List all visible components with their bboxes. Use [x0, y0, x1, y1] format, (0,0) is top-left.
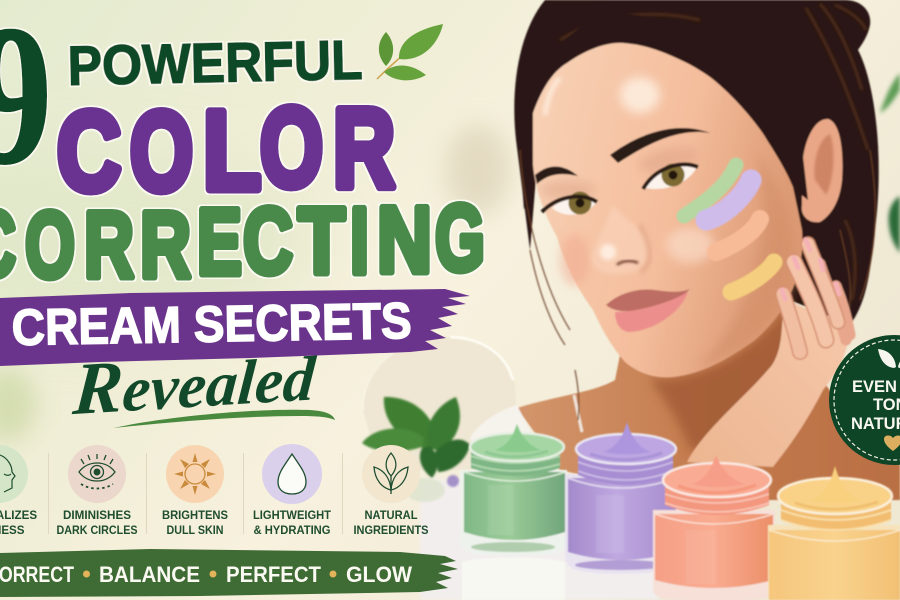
hydrating label: & HYDRATING [254, 524, 330, 537]
right eye [643, 164, 698, 189]
top strap [574, 395, 582, 432]
brightens label: BRIGHTENS [162, 509, 228, 522]
ingredients label: NATURAL [364, 509, 418, 522]
woman portrait [470, 0, 900, 500]
left eye [542, 192, 597, 215]
forehead highlight [620, 77, 660, 113]
jar: purple [565, 422, 678, 574]
redness label [0, 509, 37, 537]
ring finger [783, 294, 800, 352]
badge text [851, 378, 900, 433]
glass dome [363, 337, 520, 470]
jar: green [460, 424, 567, 556]
front hair [518, 10, 808, 210]
title: color [57, 85, 395, 214]
blurred leaf left [0, 369, 36, 441]
droplet icon [278, 454, 306, 494]
title: correcting: R [84, 192, 134, 297]
green brush underline [113, 410, 335, 428]
purple brush banner [0, 289, 470, 366]
face line icon [0, 455, 15, 492]
tagline dots [83, 570, 336, 578]
title: powerful: POWERFUL [67, 28, 363, 97]
hair bun highlights [560, 4, 868, 300]
benefit: brightens dull skin [162, 445, 228, 537]
benefit: diminishes dark circles [56, 445, 138, 537]
far fingers [820, 264, 850, 340]
ingredients label: INGREDIENTS [354, 524, 429, 537]
ear [802, 119, 842, 222]
hair strands [520, 150, 875, 420]
sun icon [174, 453, 216, 495]
peach swatch [716, 219, 760, 252]
yellow swatch [731, 262, 774, 292]
eye icon [79, 454, 115, 488]
title: color: O [130, 89, 193, 214]
badge: even skin tone naturally [829, 335, 900, 465]
script: revealed: Revealed [69, 334, 320, 431]
chest and neck [517, 310, 900, 500]
title: correcting: I [350, 188, 369, 293]
neck shadow [650, 300, 810, 450]
hydrating label: LIGHTWEIGHT [253, 509, 331, 522]
white top [470, 405, 540, 462]
jar reflection [462, 558, 565, 600]
title: correcting: G [435, 185, 485, 290]
middle finger [794, 262, 826, 340]
green swatch [684, 165, 736, 216]
face [533, 43, 802, 377]
right eyebrow [610, 128, 710, 163]
nose [591, 205, 649, 274]
brightens label: DULL SKIN [166, 524, 224, 537]
title: correcting: C [243, 188, 293, 293]
benefit: neutralizes redness [0, 445, 37, 537]
title: correcting: T [298, 188, 345, 293]
index finger [808, 244, 838, 322]
icon: leaf sprig [377, 24, 443, 80]
dark circles label: DIMINISHES [63, 509, 131, 522]
tagline [0, 562, 412, 587]
title: correcting [0, 185, 485, 297]
cheek glow [666, 227, 714, 263]
right background leaves [880, 73, 900, 253]
title: color: C [57, 89, 121, 214]
hydrating label [253, 509, 331, 537]
inner ear [814, 134, 833, 195]
badge leaf icon [878, 349, 900, 368]
tagline: BALANCE [99, 562, 200, 587]
ingredients label [354, 509, 429, 537]
title: color: O [260, 85, 323, 210]
herb leaves [362, 397, 470, 502]
benefit: lightweight hydrating [253, 444, 331, 537]
cheek blush [560, 234, 590, 286]
face shadow right [695, 150, 795, 370]
title: color: L [203, 88, 261, 213]
blurred plant shadow [446, 125, 510, 215]
benefit dividers [48, 453, 342, 534]
dark circles label: DARK CIRCLES [56, 524, 138, 537]
colour swatches on cheek [684, 165, 774, 292]
badge heart [884, 435, 900, 451]
green brush bar [0, 549, 458, 597]
soft green wash [0, 150, 310, 330]
title: correcting: R [140, 192, 191, 297]
temple highlight [545, 78, 560, 115]
hair back [514, 0, 879, 325]
purple swatch [706, 180, 751, 220]
tagline: PERFECT [226, 562, 322, 587]
title: color: R [333, 86, 395, 211]
jars [460, 422, 900, 600]
marble table [420, 480, 660, 600]
jar: yellow [768, 466, 900, 600]
nails [782, 240, 839, 299]
benefit: natural ingredients [354, 445, 429, 537]
dark circles label [56, 509, 138, 537]
tagline: GLOW [346, 562, 412, 587]
title: correcting: N [377, 187, 432, 292]
banner text: CREAM SECRETS [11, 292, 412, 356]
brightens label [162, 509, 228, 537]
plant icon [374, 453, 408, 494]
jar: peach [653, 455, 775, 600]
eye socket shading [540, 143, 700, 199]
lips [606, 289, 690, 332]
title: correcting: E [197, 189, 242, 294]
title: correcting: O [25, 192, 75, 297]
left eyebrow [535, 166, 578, 184]
hand [687, 240, 850, 467]
